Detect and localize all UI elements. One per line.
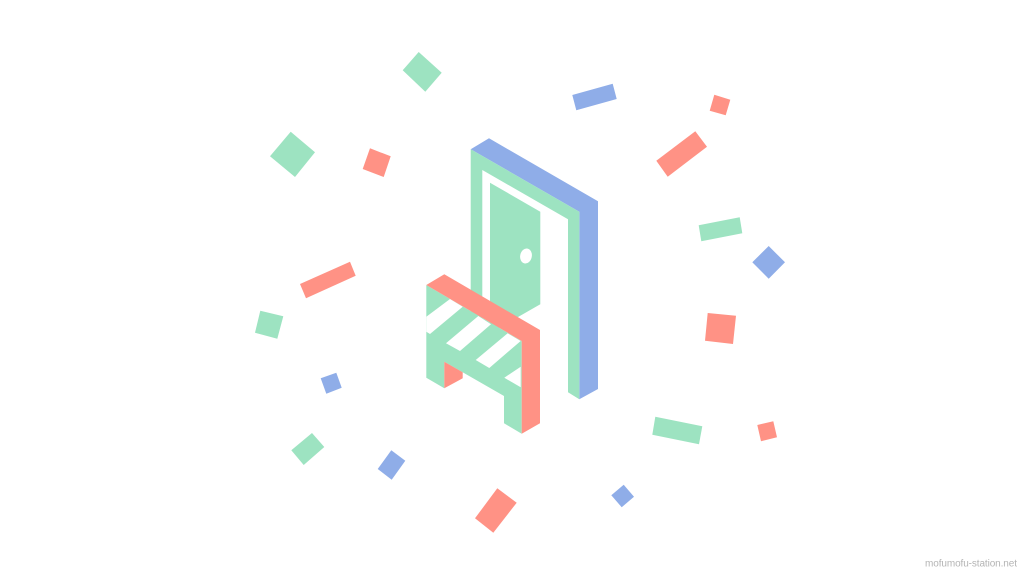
green bar right xyxy=(699,217,742,241)
green bar lower right xyxy=(652,417,702,444)
salmon bar upper right xyxy=(656,131,707,177)
blue rectangle lower left xyxy=(378,450,405,480)
door illustration xyxy=(471,138,598,399)
blue diamond right xyxy=(752,246,785,279)
large green diamond left xyxy=(270,132,315,177)
white gap two xyxy=(446,316,491,351)
chair top rail and side in salmon xyxy=(426,274,540,434)
salmon bar left xyxy=(300,262,356,298)
blue bar top xyxy=(572,84,617,110)
confetti: scattered shapes xyxy=(255,52,785,533)
door knob xyxy=(519,247,533,265)
white gap three xyxy=(476,333,521,368)
watermark: mofumofu-station.net xyxy=(925,558,1017,570)
door frame front in green xyxy=(471,149,579,399)
small blue square left xyxy=(321,373,342,394)
white gap one xyxy=(426,299,463,334)
green rectangle lower left xyxy=(291,433,324,465)
small blue diamond bottom xyxy=(611,485,634,507)
small salmon square lower right xyxy=(757,421,777,441)
chair front in green xyxy=(426,285,522,434)
door leaf xyxy=(490,183,540,333)
salmon square upper left xyxy=(363,148,391,177)
salmon square right xyxy=(705,313,736,344)
chair illustration xyxy=(426,274,540,434)
white gap four xyxy=(504,367,521,387)
door frame side in blue xyxy=(471,138,598,399)
chair inner leg shadow xyxy=(444,362,463,388)
salmon rectangle bottom xyxy=(475,488,517,533)
green diamond top xyxy=(403,52,442,92)
small salmon rectangle top right xyxy=(710,95,730,115)
green square left xyxy=(255,311,283,339)
